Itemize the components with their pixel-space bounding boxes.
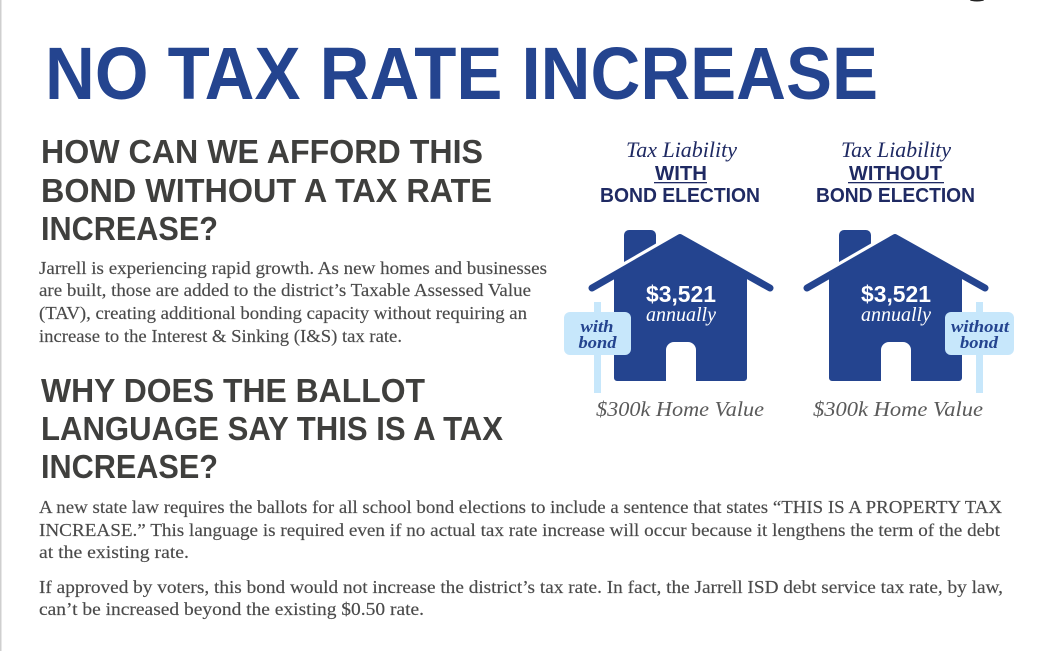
text block: state law requirement: A new state law requires the ballots for all school bond elections to include a sentence that states “THIS IS A PROPERTY TAX [39,497,1002,517]
heading: why does the ballot language: INCREASE? [41,448,218,485]
amount: without bond: $3,521 [861,281,931,307]
text block: state law requirement: INCREASE.” This language is required even if no actual tax rate increase will occur because it lengthens the term of the debt [39,520,1000,540]
title: NO TAX RATE INCREASE [45,32,878,115]
amount: with bond: annually [646,304,716,326]
panel: tax liability with bond election [564,137,770,421]
text block: rapid growth explanation: increase to the Interest & Sinking (I&S) tax rate. [39,326,402,346]
caption: home value: $300k Home Value [596,397,764,421]
sign: with bond: with [580,317,614,336]
text block: rapid growth explanation: (TAV), creating additional bonding capacity without requiring an [39,303,527,323]
sign: without bond: bond [960,333,999,352]
icon: house without bond [807,230,985,381]
text block: state law requirement: at the existing rate. [39,542,189,562]
sign: without bond: without [951,317,1010,336]
text block: debt service rate cap: can’t be increased beyond the existing $0.50 rate. [39,599,424,619]
text block: debt service rate cap: If approved by voters, this bond would not increase the district’s tax rate. In fact, the Jarrell ISD debt service tax rate, by law, [39,577,1003,597]
amount: without bond [861,281,931,326]
heading: without bond election: WITHOUT [849,163,942,185]
sign: without bond [945,302,1014,393]
heading: with bond election: Tax Liability [626,137,737,162]
text block: rapid growth explanation: are built, those are added to the district’s Taxable Assessed Value [39,280,531,300]
panel: tax liability without bond election [807,137,1014,421]
caption: home value: $300k Home Value [813,397,983,421]
heading: how can we afford: BOND WITHOUT A TAX RATE [41,172,492,209]
heading: with bond election [600,137,760,207]
heading: why does the ballot language: WHY DOES THE BALLOT [41,372,425,409]
sign: with bond [564,302,631,393]
heading: without bond election: Tax Liability [841,137,951,162]
heading: how can we afford: HOW CAN WE AFFORD THIS [41,133,483,170]
amount: without bond: annually [861,304,931,326]
text block: rapid growth explanation: Jarrell is experiencing rapid growth. As new homes and businesses [39,258,547,278]
text block: state law requirement [39,497,1002,562]
heading: without bond election [816,137,975,207]
heading: without bond election: BOND ELECTION [816,185,975,207]
icon: house with bond [592,230,770,381]
amount: with bond: $3,521 [646,281,716,307]
heading: with bond election: BOND ELECTION [600,185,760,207]
heading: how can we afford: INCREASE? [41,210,218,247]
heading: why does the ballot language [41,372,503,485]
heading: why does the ballot language: LANGUAGE SAY THIS IS A TAX [41,410,503,447]
amount: with bond [646,281,716,326]
text block: debt service rate cap [39,577,1003,619]
text block: rapid growth explanation [39,258,547,346]
sign: with bond: bond [578,333,617,352]
heading: how can we afford [41,133,492,247]
heading: with bond election: WITH [655,163,707,185]
